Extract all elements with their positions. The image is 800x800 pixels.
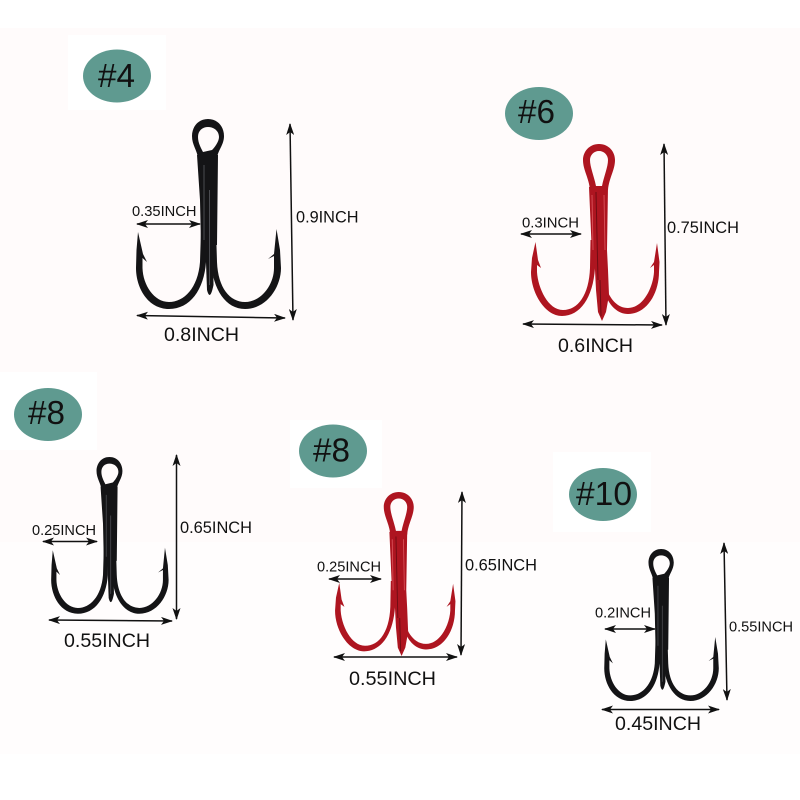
arrow: height xyxy=(724,543,727,700)
badge: #10 xyxy=(569,468,637,521)
badge: #8 red xyxy=(299,424,367,478)
arrow: width xyxy=(602,708,719,710)
label: 0.6INCH: 0.6INCH xyxy=(558,335,633,357)
panel: size 4 black hook xyxy=(83,50,358,346)
arrow: height xyxy=(664,144,666,325)
panel: size 10 black hook xyxy=(569,468,793,735)
label: 0.75INCH: 0.75INCH xyxy=(667,219,739,237)
arrow: hook gap xyxy=(137,223,200,225)
label: 0.65INCH: 0.65INCH xyxy=(180,519,252,537)
label: 0.9INCH: 0.9INCH xyxy=(296,208,358,226)
panel: size 6 red hook xyxy=(505,87,739,357)
icon: black treble hook 10 xyxy=(604,549,719,701)
arrow: width xyxy=(523,324,662,325)
badge: #6: #6 xyxy=(518,93,555,130)
badge: #10: #10 xyxy=(576,475,632,512)
label: 0.45INCH: 0.45INCH xyxy=(615,713,701,735)
icon: red treble hook 8 xyxy=(335,492,455,656)
badge: #6 xyxy=(505,87,573,140)
label: 0.55INCH: 0.55INCH xyxy=(349,668,436,690)
icon: black treble hook 8 xyxy=(51,457,169,614)
arrow: width xyxy=(334,656,457,658)
label: 0.2INCH: 0.2INCH xyxy=(595,606,651,622)
arrow: hook gap xyxy=(605,628,655,630)
label: 0.3INCH: 0.3INCH xyxy=(522,216,579,232)
label: 0.25INCH: 0.25INCH xyxy=(32,523,96,539)
badge: #8 black xyxy=(14,388,82,441)
panel: size 8 red hook xyxy=(299,424,537,690)
arrow: hook gap xyxy=(521,233,581,235)
badge: #8 black: #8 xyxy=(28,394,65,431)
arrow: width xyxy=(137,316,285,318)
icon: red treble hook 6 xyxy=(531,144,660,321)
arrow: height xyxy=(176,455,178,619)
badge: #4: #4 xyxy=(98,57,135,94)
label: 0.8INCH: 0.8INCH xyxy=(164,324,239,346)
arrow: width xyxy=(49,620,172,621)
badge: #8 red: #8 xyxy=(313,432,350,468)
label: 0.65INCH: 0.65INCH xyxy=(465,556,537,574)
arrow: height xyxy=(290,124,293,320)
label: 0.25INCH: 0.25INCH xyxy=(317,560,381,576)
label: 0.55INCH: 0.55INCH xyxy=(729,620,793,636)
arrow: hook gap xyxy=(329,578,381,580)
arrow: height xyxy=(461,492,462,655)
arrow: hook gap xyxy=(43,540,97,542)
panel: size 8 black hook xyxy=(14,388,252,652)
icon: black treble hook 4 xyxy=(136,119,281,309)
label: 0.35INCH: 0.35INCH xyxy=(132,204,196,220)
badge: #4 xyxy=(83,50,151,102)
label: 0.55INCH: 0.55INCH xyxy=(64,630,150,652)
